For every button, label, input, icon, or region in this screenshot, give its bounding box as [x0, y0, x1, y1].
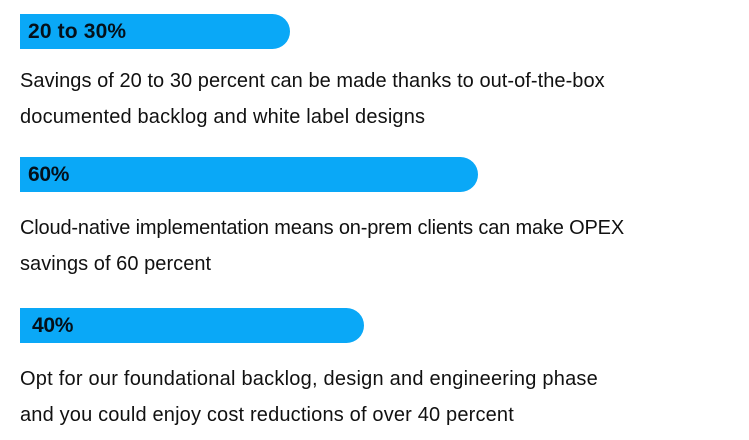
bar: 20 to 30%: 20 to 30%	[28, 20, 126, 43]
text: cloud-native description line 2: savings of 60 percent	[20, 253, 211, 275]
text: savings description line 2: documented backlog and white label designs	[20, 106, 425, 128]
panel: 20 to 30% savings	[20, 14, 605, 128]
bar: 40%	[20, 308, 364, 343]
panel: 60% savings	[20, 157, 624, 275]
text: foundational phase description line 2: and you could enjoy cost reductions of over 40 percent	[20, 404, 514, 426]
text: savings description line 1: Savings of 20 to 30 percent can be made thanks to out-of-the-box	[20, 70, 605, 92]
bar: 20 to 30%	[20, 14, 290, 49]
bar: 40%: 40%	[32, 314, 73, 337]
bar: 60%	[20, 157, 478, 192]
text: cloud-native description line 1: Cloud-native implementation means on-prem clients can make OPEX	[20, 217, 624, 239]
panel: 40% savings	[20, 308, 598, 426]
text: foundational phase description line 1: Opt for our foundational backlog, design and engineering phase	[20, 368, 598, 390]
bar: 60%: 60%	[28, 163, 69, 186]
